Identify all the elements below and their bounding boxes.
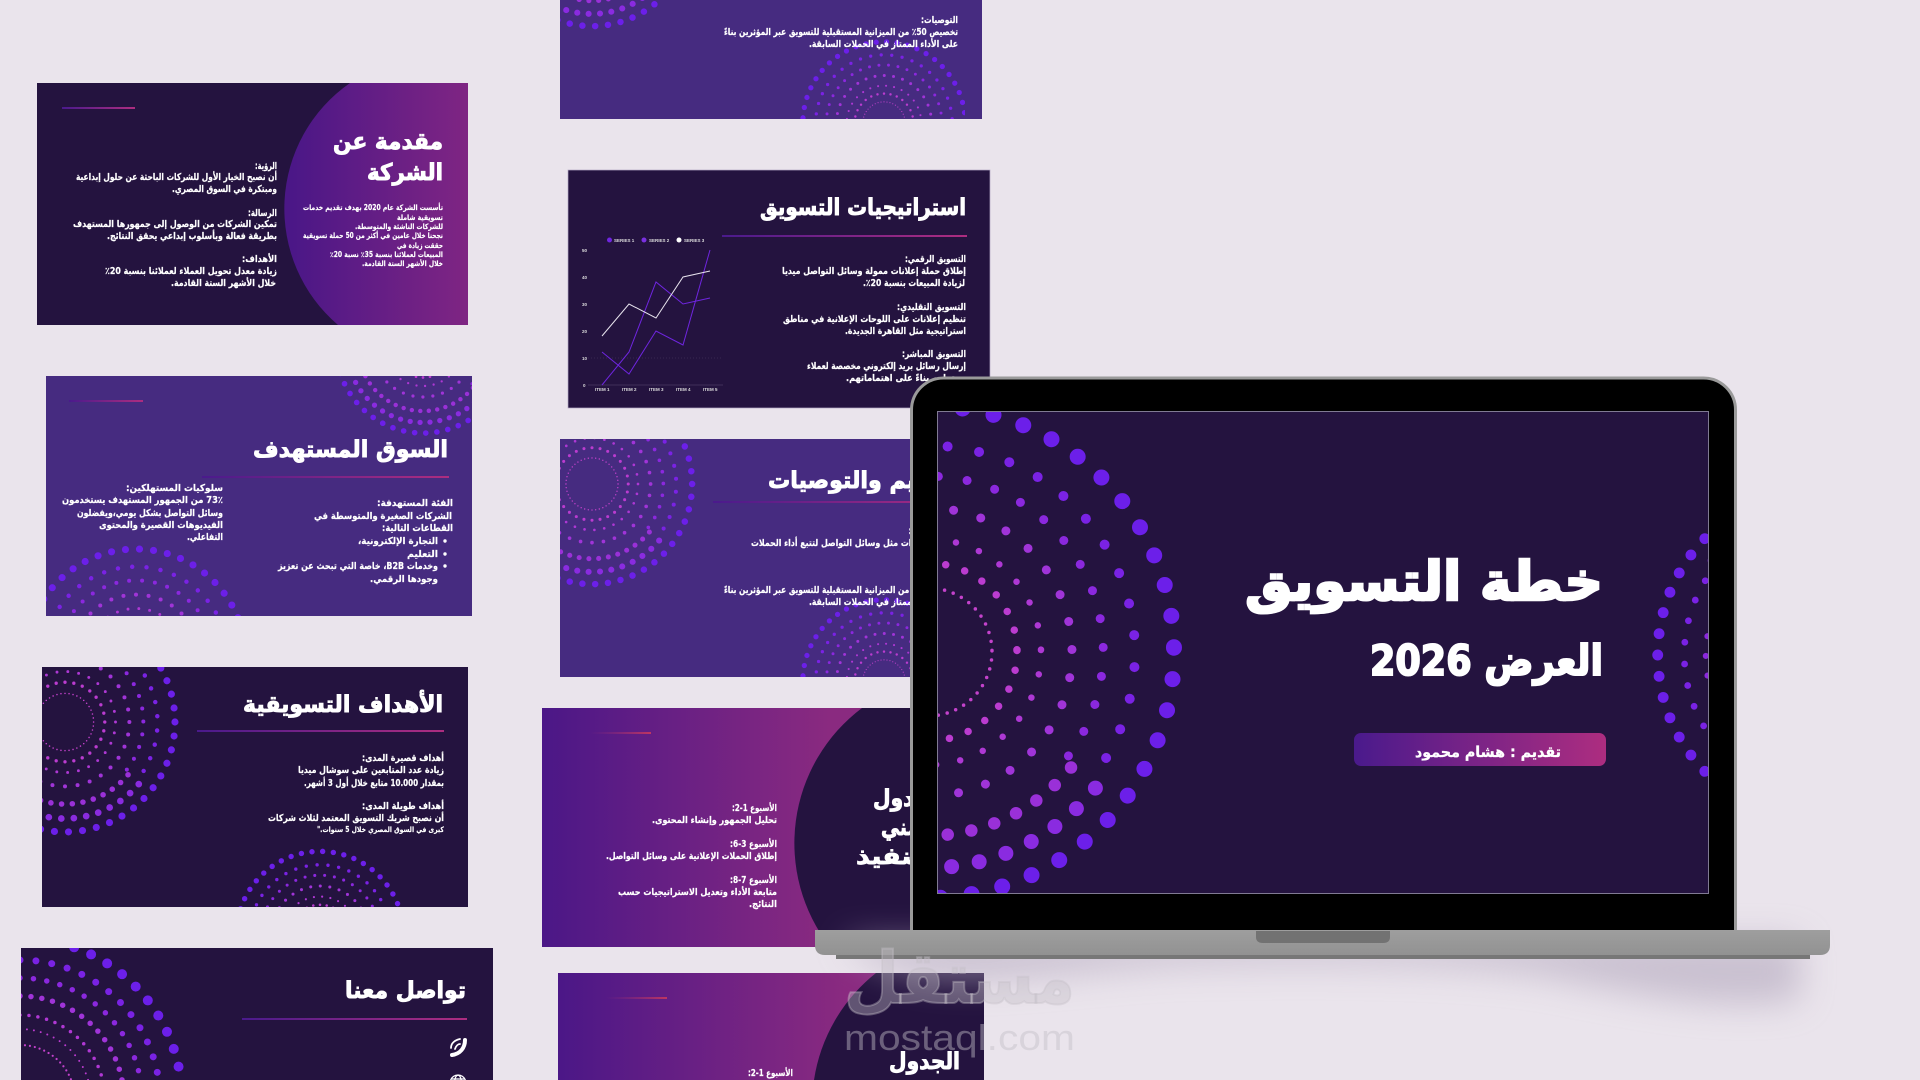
line chart: ITEM 3 (649, 387, 664, 392)
intro paragraph: خلال الأشهر الستة القادمة. (362, 259, 443, 268)
target segment text: الشركات الصغيرة والمتوسطة في (314, 511, 452, 522)
watermark (844, 936, 1075, 1058)
panel: company introduction slide (37, 83, 468, 325)
panel: marketing goals slide (42, 667, 468, 907)
vision mission goals text: الرؤية: (255, 161, 277, 172)
vision mission goals text: تمكين الشركات من الوصول إلى جمهورها المستهدف (73, 219, 277, 230)
base lower strip (836, 955, 1810, 959)
line chart: SERIES 2 (649, 238, 670, 243)
accent line (590, 732, 651, 734)
line chart: ITEM 1 (595, 387, 610, 392)
icon: phone (451, 1039, 465, 1055)
intro paragraph: تأسست الشركة عام 2020 بهدف تقديم خدمات (303, 202, 443, 212)
strategies text: التسويق المباشر: (902, 349, 966, 360)
strategies text: التسويق التقليدي: (897, 302, 966, 313)
vision mission goals text: بطريقة فعالة وبأسلوب إبداعي يحقق النتائج. (107, 229, 277, 242)
dot pattern top left (42, 667, 178, 836)
vision mission goals text: أن نصبح الخيار الأول للشركات الباحثة عن حلول إبداعية (76, 170, 277, 183)
presenter button: تقديم : هشام محمود (1415, 743, 1561, 761)
heading rule (713, 501, 967, 503)
heading rule (242, 1018, 467, 1020)
trackpad notch (1256, 931, 1390, 943)
target segment text: التعليم (407, 549, 438, 560)
evaluation text (724, 526, 958, 608)
heading rule (722, 235, 967, 237)
strategies text: التسويق الرقمي: (905, 254, 966, 265)
line chart: 50 (582, 248, 588, 253)
intro paragraph (303, 202, 443, 268)
dot pattern bottom (800, 39, 965, 119)
intro paragraph: نجحنا خلال عامين في أكثر من 50 حملة تسويقية (303, 230, 443, 240)
line chart: 10 (582, 356, 588, 361)
dot pattern top left (560, 439, 696, 588)
dot pattern left (938, 412, 1182, 893)
dot pattern top left (560, 0, 658, 30)
intro paragraph: المبيعات لعملائنا بنسبة 35٪ نسبة 20٪ (330, 250, 443, 259)
panel: contact slide (cropped at bottom) (21, 948, 493, 1080)
goals text: أهداف قصيرة المدى: (362, 751, 444, 764)
timeline first line: الأسبوع 1-2: (748, 1067, 793, 1079)
timeline heading: للتنفيذ (856, 844, 944, 870)
strategies text: إطلاق حملة إعلانات ممولة وسائل التواصل ميديا (782, 266, 966, 277)
icon: globe (451, 1075, 465, 1080)
goals text: بمقدار 10.000 متابع خلال أول 3 أشهر. (304, 776, 444, 789)
vision mission goals text: زيادة معدل تحويل العملاء لعملائنا بنسبة 20٪ (105, 266, 277, 277)
watermark: مستقل (844, 936, 1075, 1020)
target segment text: القطاعات التالية: (382, 523, 453, 534)
strategies text: لزيادة المبيعات بنسبة 20٪. (863, 278, 965, 289)
panel: implementation timeline slide (542, 708, 944, 947)
timeline text: الأسبوع 1-2: (732, 802, 777, 814)
timeline text: الأسبوع 3-6: (730, 838, 777, 850)
strategies text: استراتيجية مثل القاهرة الجديدة. (845, 326, 966, 337)
watermark: mostaql.com (844, 1017, 1075, 1058)
laptop base (815, 930, 1830, 955)
line chart: 30 (582, 302, 588, 307)
line chart: ITEM 4 (676, 387, 691, 392)
heading rule (197, 730, 444, 732)
goals heading: الأهداف التسويقية (243, 689, 443, 718)
target segment text (277, 498, 453, 585)
line chart: ITEM 2 (622, 387, 637, 392)
timeline text (606, 802, 777, 910)
vision mission goals text: الأهداف: (242, 253, 277, 265)
timeline heading (856, 786, 944, 870)
goals text (268, 751, 445, 834)
heading rule (202, 476, 449, 478)
target segment text: وجودها الرقمي. (370, 574, 438, 585)
panel: target market slide (46, 376, 472, 616)
laptop bezel (912, 378, 1736, 932)
laptop shadow (840, 940, 1800, 1004)
strategies text: محتملين بناءً على اهتماماتهم. (846, 373, 966, 384)
evaluation text: التوصيات: (921, 573, 958, 584)
contact heading: تواصل معنا (345, 978, 466, 1004)
target market heading: السوق المستهدف (253, 437, 448, 463)
consumer behaviour text: سلوكيات المستهلكين: (126, 483, 223, 494)
target segment text: التجارة الإلكترونية، (358, 536, 438, 547)
panel: marketing strategies slide (568, 170, 990, 408)
evaluation text: التقييم: (908, 526, 958, 537)
consumer behaviour text (62, 483, 223, 543)
timeline heading: الجدول (873, 786, 944, 812)
intro heading (333, 129, 443, 186)
main title: خطة التسويق (1245, 550, 1603, 613)
vision mission goals text (73, 161, 277, 289)
recommendations text: التوصيات: (921, 15, 958, 26)
evaluation text: تخصيص 50٪ من الميزانية المستقبلية للتسويق عبر المؤثرين بناءً (724, 585, 958, 596)
consumer behaviour text: التفاعلي. (187, 532, 223, 543)
timeline text: إطلاق الحملات الإعلانية على وسائل التواصل. (606, 851, 777, 862)
timeline text: النتائج. (749, 899, 777, 910)
timeline text: الأسبوع 7-8: (730, 874, 777, 886)
evaluation heading: التقييم والتوصيات (768, 468, 966, 494)
dot pattern bottom left (46, 546, 241, 616)
line chart (582, 238, 723, 392)
intro paragraph: تسويقية شاملة (397, 213, 443, 222)
consumer behaviour text: 73٪ من الجمهور المستهدف يستخدمون (62, 495, 223, 506)
vision mission goals text: خلال الأشهر الستة القادمة. (171, 277, 276, 289)
line chart: 40 (582, 275, 588, 280)
strategies text: تنظيم إعلانات على اللوحات الإعلانية في مناطق (783, 314, 966, 325)
consumer behaviour text: الفيديوهات القصيرة والمحتوى (99, 520, 223, 531)
timeline heading: الجدول (889, 1049, 960, 1075)
intro heading: مقدمة عن (333, 129, 443, 155)
vision mission goals text: الرسالة: (248, 208, 277, 219)
line chart: SERIES 1 (614, 238, 635, 243)
dot pattern right (1652, 533, 1708, 777)
panel: timeline slide duplicate (cropped at bottom) (558, 973, 984, 1080)
dot pattern top right (340, 376, 472, 436)
accent line (606, 997, 667, 999)
line chart: 0 (583, 383, 586, 388)
target segment text: الفئة المستهدفة: (377, 498, 453, 509)
dot pattern bottom (238, 848, 400, 907)
dark circle (794, 708, 968, 947)
gradient circle (284, 83, 468, 325)
panel: title slide on screen (937, 411, 1709, 894)
line chart: ITEM 5 (703, 387, 718, 392)
goals text: أهداف طويلة المدى: (362, 799, 444, 812)
recommendations text: تخصيص 50٪ من الميزانية المستقبلية للتسويق عبر المؤثرين بناءً (724, 27, 958, 38)
vision mission goals text: ومبتكرة في السوق المصري. (172, 184, 277, 195)
dark circle (814, 973, 984, 1080)
goals text: كبرى في السوق المصري خلال 5 سنوات." (317, 825, 445, 834)
timeline heading: الزمني (881, 815, 944, 841)
presenter button (1354, 733, 1606, 766)
timeline text: متابعة الأداء وتعديل الاستراتيجيات حسب (618, 886, 777, 898)
intro paragraph: حققت زيادة في (397, 241, 443, 250)
timeline text: تحليل الجمهور وإنشاء المحتوى. (652, 815, 777, 826)
subtitle year: العرض 2026 (1370, 636, 1603, 686)
strategies heading: استراتيجيات التسويق (760, 195, 966, 221)
panel: recommendations slide (cropped at top) (560, 0, 982, 119)
line chart: SERIES 3 (684, 238, 705, 243)
panel: evaluation and recommendations slide (560, 439, 966, 677)
line chart: 20 (582, 329, 588, 334)
target segment text: وخدمات B2B، خاصة التي تبحث عن تعزيز (277, 561, 438, 572)
recommendations text (724, 15, 958, 50)
strategies text (782, 254, 966, 384)
laptop (678, 378, 1920, 959)
intro paragraph: للشركات الناشئة والمتوسطة. (355, 222, 443, 231)
dot pattern bottom (800, 597, 910, 677)
dot pattern (20, 938, 181, 1080)
accent line (69, 400, 143, 402)
strategies text: إرسال رسائل بريد إلكتروني مخصصة لعملاء (807, 361, 966, 372)
consumer behaviour text: وسائل التواصل بشكل يومي،ويفضلون (77, 508, 223, 519)
intro heading: الشركة (367, 160, 443, 186)
accent line (62, 107, 135, 109)
